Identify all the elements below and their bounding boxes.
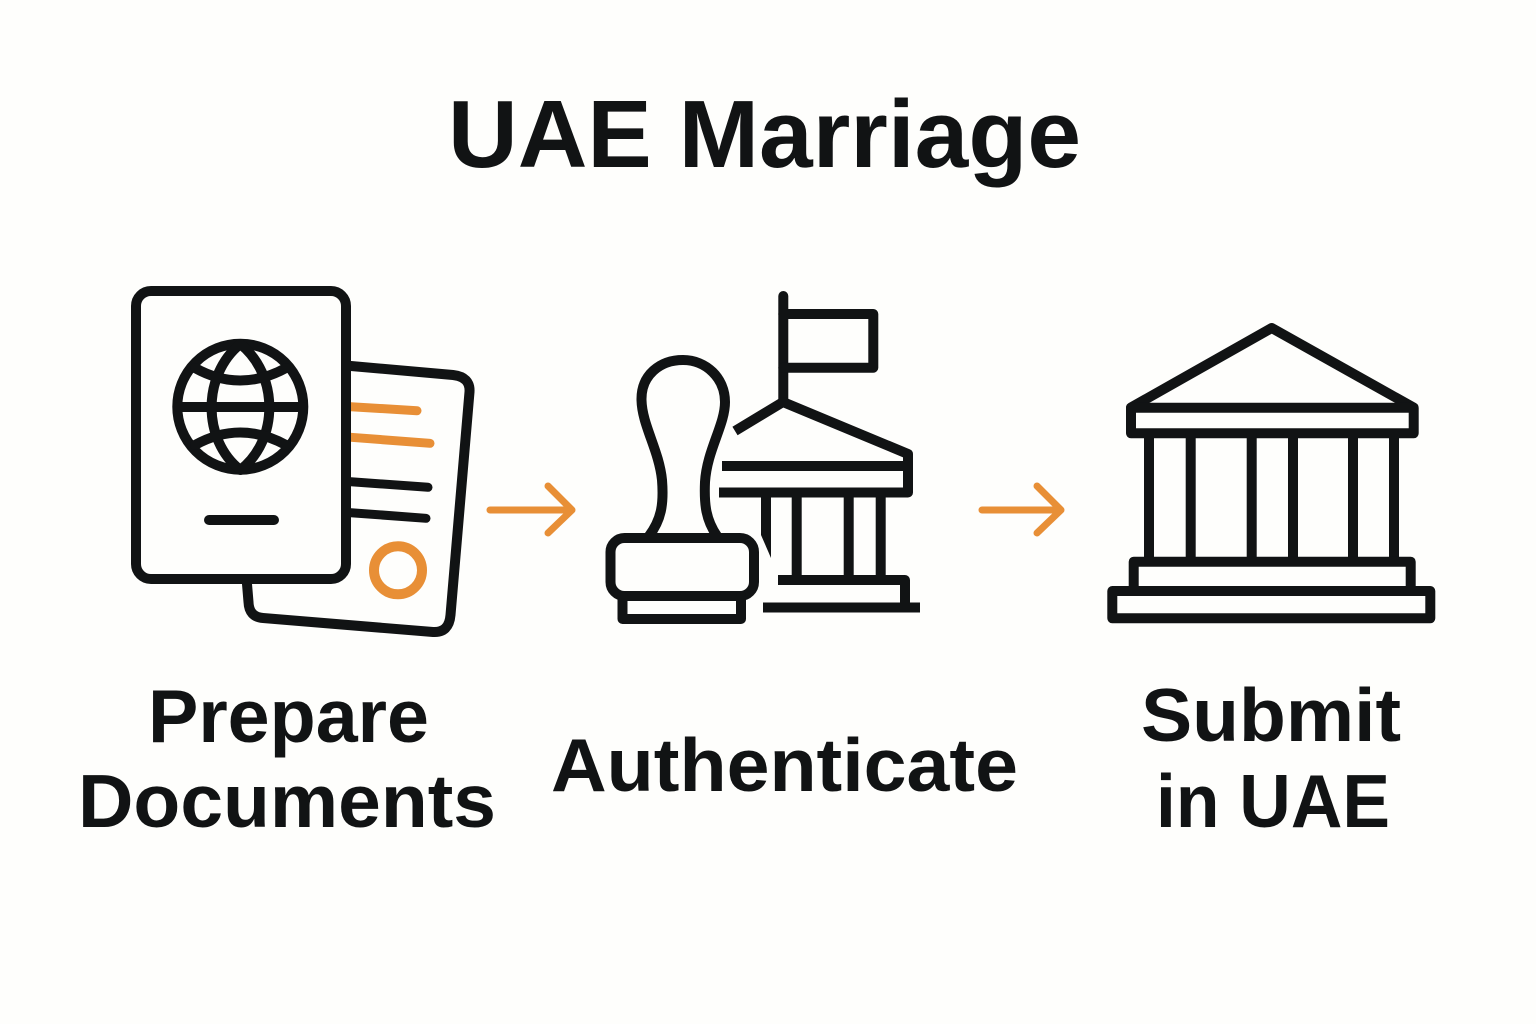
icon: passport [136, 291, 346, 579]
label: prepare documents: Documents [78, 759, 496, 843]
icon: government building with flag [719, 296, 920, 608]
title: UAE Marriage [448, 81, 1081, 188]
label: submit in UAE: in UAE [1156, 759, 1390, 843]
passport name line [209, 515, 274, 525]
icon: rubber stamp [610, 360, 754, 619]
arrow: step 2 to step 3 [982, 486, 1061, 533]
globe [177, 344, 303, 470]
step 2: authenticate icon [610, 296, 920, 619]
label: prepare documents [78, 674, 496, 843]
step 3: submit icon, government building [1112, 328, 1430, 618]
entablature [1131, 408, 1414, 433]
step 1: prepare documents icon [136, 291, 470, 632]
black text lines [351, 482, 428, 518]
label: authenticate: Authenticate [551, 723, 1018, 807]
lower step [1112, 591, 1430, 618]
arrow: step 1 to step 2 [490, 486, 572, 533]
upper step [1134, 562, 1411, 591]
roof pediment [1131, 328, 1414, 408]
label: prepare documents: Prepare [148, 674, 429, 758]
label: submit in UAE [1141, 673, 1401, 843]
orange text lines [351, 407, 430, 443]
columns [1149, 433, 1394, 561]
icon: certificate document [247, 366, 470, 632]
orange seal [374, 546, 422, 594]
label: submit in UAE: Submit [1141, 673, 1401, 757]
